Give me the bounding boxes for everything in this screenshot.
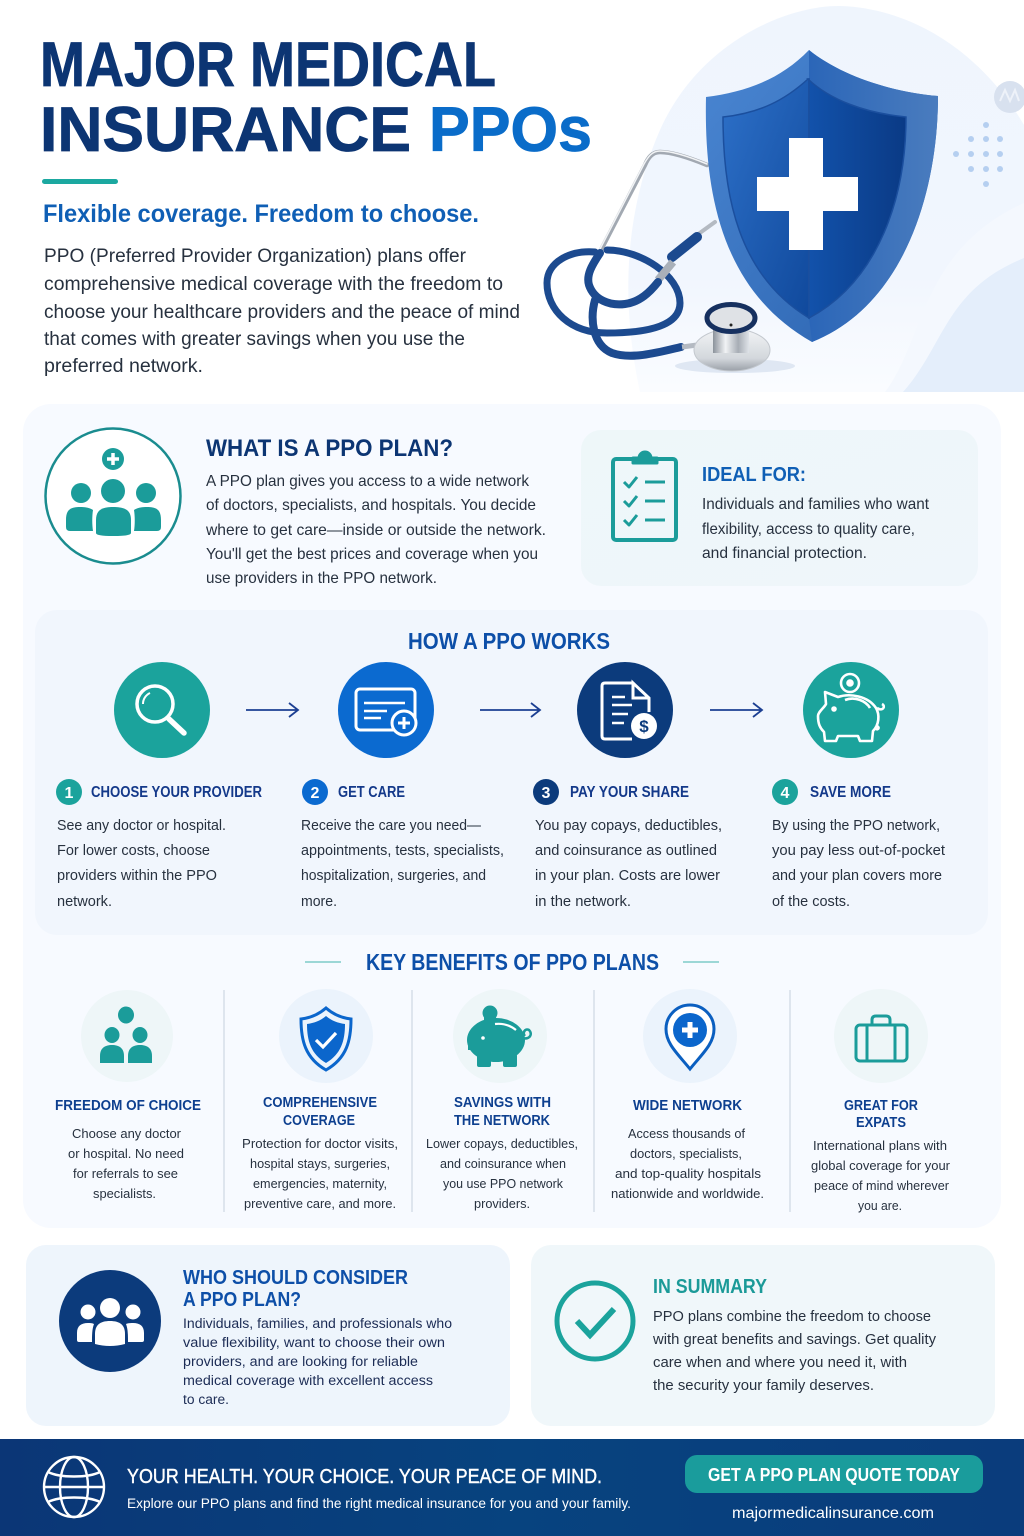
step text: hospitalization, surgeries, and (301, 868, 486, 884)
step text (301, 818, 504, 910)
benefit heading: EXPATS (856, 1115, 906, 1131)
benefit text: or hospital. No need (68, 1147, 184, 1161)
heading: WHAT IS A PPO PLAN? (206, 435, 453, 462)
step text: of the costs. (772, 894, 850, 910)
benefit text: global coverage for your (811, 1159, 950, 1173)
text block: medical coverage with excellent access (183, 1373, 433, 1389)
arrow (480, 703, 540, 717)
icon: globe (44, 1457, 104, 1517)
benefit heading: COVERAGE (283, 1113, 355, 1129)
website: majormedicalinsurance.com (732, 1505, 934, 1522)
tagline: YOUR HEALTH. YOUR CHOICE. YOUR PEACE OF MIND. (127, 1466, 602, 1488)
step heading: 3 (542, 785, 551, 802)
step 2 (301, 662, 504, 910)
benefit: comprehensive coverage (242, 989, 398, 1211)
step heading: 1 (65, 785, 74, 802)
step text: you pay less out-of-pocket (772, 843, 945, 859)
benefit heading (454, 1095, 551, 1129)
title: PPOs (429, 95, 592, 165)
step 4 (772, 662, 945, 910)
step text: and coinsurance as outlined (535, 843, 717, 859)
benefit text: specialists. (93, 1187, 156, 1201)
benefit text: International plans with (813, 1139, 947, 1153)
icon: clipboard (613, 452, 676, 540)
text block (205, 473, 546, 587)
benefit text: nationwide and worldwide. (611, 1187, 764, 1201)
watermark badge (994, 81, 1024, 113)
benefit text: you are. (858, 1199, 902, 1213)
benefit text (811, 1139, 950, 1213)
benefit heading: GREAT FOR (844, 1098, 918, 1114)
step text: You pay copays, deductibles, (535, 818, 722, 834)
step heading: SAVE MORE (810, 784, 891, 801)
step text: By using the PPO network, (772, 818, 940, 834)
benefit text: and coinsurance when (440, 1157, 566, 1171)
icon: piggy bank outline (803, 662, 899, 758)
benefit text: and top-quality hospitals (615, 1167, 761, 1181)
icon: group (59, 1270, 161, 1372)
benefit heading: COMPREHENSIVE (263, 1095, 377, 1111)
text block: care when and where you need it, with (653, 1354, 907, 1371)
icon: bill document: $ (639, 717, 649, 736)
heading: HOW A PPO WORKS (408, 628, 610, 654)
text block: the security your family deserves. (653, 1377, 874, 1394)
benefit text (611, 1127, 764, 1201)
title: INSURANCE (40, 95, 411, 165)
step heading: CHOOSE YOUR PROVIDER (91, 784, 262, 801)
text block (702, 496, 930, 562)
step heading (533, 779, 689, 805)
step 3 (533, 662, 722, 910)
benefit text: peace of mind wherever (814, 1179, 949, 1193)
step text: in the network. (535, 894, 631, 910)
heading: IN SUMMARY (653, 1276, 768, 1298)
step heading: GET CARE (338, 784, 405, 801)
intro paragraph: that comes with greater savings when you use the (44, 328, 465, 350)
benefit text: hospital stays, surgeries, (250, 1157, 390, 1171)
icon: piggy bank filled (453, 989, 547, 1083)
call to action button: GET A PPO PLAN QUOTE TODAY (708, 1465, 960, 1485)
benefit heading: WIDE NETWORK (633, 1098, 742, 1114)
icon: check circle (557, 1283, 633, 1359)
text block: providers, and are looking for reliable (183, 1354, 418, 1370)
benefit heading (263, 1095, 377, 1129)
benefit text: Protection for doctor visits, (242, 1137, 398, 1151)
arrow (246, 703, 298, 717)
step text: more. (301, 894, 337, 910)
benefit text: you use PPO network (443, 1177, 564, 1191)
subtitle: Flexible coverage. Freedom to choose. (43, 200, 479, 228)
text block: with great benefits and savings. Get quality (652, 1331, 936, 1348)
step heading: PAY YOUR SHARE (570, 784, 689, 801)
heading: IDEAL FOR: (702, 464, 806, 486)
text block (183, 1316, 452, 1408)
benefit: great for expats (811, 989, 950, 1213)
icon: magnifier (114, 662, 210, 758)
decorative dot grid (953, 122, 1003, 187)
footer text: Explore our PPO plans and find the right medical insurance for you and your family. (127, 1495, 631, 1511)
panel: ideal for (581, 430, 978, 586)
benefit heading (844, 1098, 918, 1131)
intro paragraph: preferred network. (44, 355, 203, 377)
panel: who should consider (26, 1245, 510, 1426)
benefit text: Choose any doctor (72, 1127, 181, 1141)
step text: providers within the PPO (57, 868, 217, 884)
step text: and your plan covers more (772, 868, 942, 884)
text block: PPO plans combine the freedom to choose (653, 1308, 931, 1325)
step 1 (56, 662, 262, 910)
benefit: wide network (611, 989, 764, 1201)
benefit dividers (224, 990, 790, 1212)
benefit text: preventive care, and more. (244, 1197, 396, 1211)
benefit: savings with the network (426, 989, 578, 1211)
intro paragraph: PPO (Preferred Provider Organization) plans offer (44, 245, 466, 267)
benefit text: emergencies, maternity, (253, 1177, 387, 1191)
text block (652, 1308, 936, 1394)
panel: what is a PPO plan (46, 428, 546, 587)
benefit heading: FREEDOM OF CHOICE (55, 1098, 201, 1114)
text block: where to get care—inside or outside the network. (205, 522, 546, 539)
heading: key benefits: KEY BENEFITS OF PPO PLANS (366, 949, 659, 975)
step text: For lower costs, choose (57, 843, 210, 859)
icon: bill document (577, 662, 673, 758)
intro paragraph (44, 245, 520, 377)
text block: flexibility, access to quality care, (702, 521, 915, 538)
text block: and financial protection. (702, 545, 867, 562)
text block: to care. (183, 1392, 229, 1408)
benefit: freedom of choice (55, 990, 201, 1201)
icon: location pin (643, 989, 737, 1083)
benefit text: for referrals to see (73, 1167, 178, 1181)
panel: main content background (23, 404, 1001, 1228)
intro paragraph: comprehensive medical coverage with the freedom to (44, 273, 503, 295)
step heading (772, 779, 891, 805)
benefit text: Access thousands of (628, 1127, 745, 1141)
text block: of doctors, specialists, and hospitals. You decide (206, 497, 536, 514)
benefit heading: SAVINGS WITH (454, 1095, 551, 1111)
step text: See any doctor or hospital. (57, 818, 226, 834)
icon: shield with cross (706, 50, 938, 342)
benefit text (68, 1127, 184, 1201)
benefit text: Lower copays, deductibles, (426, 1137, 578, 1151)
step heading (302, 779, 405, 805)
panel: in summary (531, 1245, 995, 1426)
step text (535, 818, 722, 910)
intro paragraph: choose your healthcare providers and the peace of mind (44, 301, 520, 323)
teal accent bar (42, 179, 118, 184)
footer banner (0, 1439, 1024, 1536)
benefit text (426, 1137, 578, 1211)
text block: A PPO plan gives you access to a wide network (206, 473, 529, 490)
title: MAJOR MEDICAL (40, 30, 496, 100)
step text (772, 818, 945, 910)
title (40, 30, 592, 165)
icon: card with plus (338, 662, 434, 758)
step text: appointments, tests, specialists, (301, 843, 504, 859)
arrow (710, 703, 762, 717)
icon: stethoscope (547, 151, 795, 373)
text block: Individuals and families who want (702, 496, 930, 513)
benefit text: doctors, specialists, (630, 1147, 742, 1161)
step text: in your plan. Costs are lower (535, 868, 720, 884)
text block: use providers in the PPO network. (206, 570, 437, 587)
text block: Individuals, families, and professionals who (183, 1316, 452, 1332)
step text: Receive the care you need— (301, 818, 481, 834)
step text: network. (57, 894, 112, 910)
step text (57, 818, 226, 910)
call to action button (685, 1455, 983, 1493)
icon: shield check (279, 989, 373, 1083)
benefit heading: THE NETWORK (454, 1113, 550, 1129)
benefit text (242, 1137, 398, 1211)
heading: WHO SHOULD CONSIDER (183, 1266, 408, 1289)
panel: how a PPO works (35, 610, 988, 935)
icon: three people (81, 990, 173, 1082)
step heading: 2 (311, 785, 320, 802)
icon: suitcase (834, 989, 928, 1083)
text block: value flexibility, want to choose their own (183, 1335, 445, 1351)
step heading: 4 (781, 785, 790, 802)
icon: people with plus (46, 428, 180, 564)
heading: A PPO PLAN? (183, 1288, 301, 1311)
heading (183, 1266, 408, 1311)
hero background (628, 6, 1024, 392)
text block: You'll get the best prices and coverage when you (206, 546, 538, 563)
step heading (56, 779, 262, 805)
benefit text: providers. (474, 1197, 530, 1211)
